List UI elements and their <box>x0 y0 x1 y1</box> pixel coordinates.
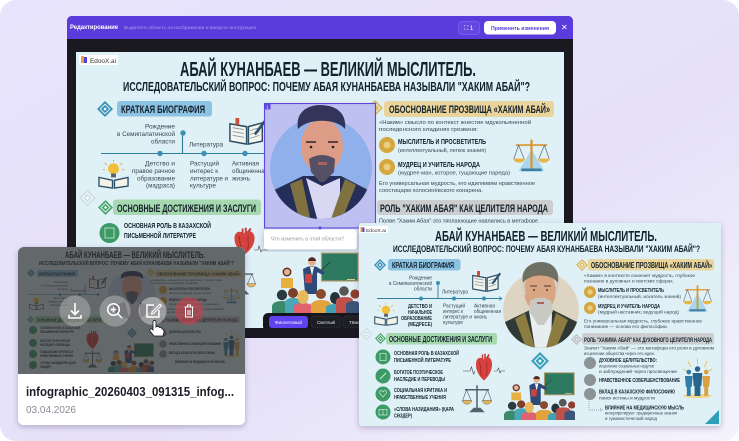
section: achievements: «СЛОВА НАЗИДАНИЯ» (ҚАРА <box>394 407 454 413</box>
gallery thumbnail: в Семипалатинской <box>41 284 68 288</box>
timeline: Активная <box>474 304 495 310</box>
section: nickname: Его универсальная мудрость, глубокое нравственное <box>584 318 702 324</box>
section: nickname: ОБОСНОВАНИЕ ПРОЗВИЩА «ХАКИМ АБАЙ» <box>389 103 550 116</box>
section: healer: Полве "Хаким Абая" это тяплаюющие навлились в метафоре <box>379 218 538 224</box>
section: nickname: (интеллектуальный, легкок знания) <box>398 147 486 154</box>
icon: book and pen <box>473 271 501 291</box>
section: achievements: ПИСЬМЕННОЙ ЛИТЕРАТУРЕ <box>394 356 451 364</box>
timeline: жизнь <box>474 314 487 320</box>
prompt input: Что изменить в этой области? <box>271 236 344 242</box>
timeline: литературе и <box>443 314 472 320</box>
panel: editor window <box>67 16 573 338</box>
section: nickname: Его универсальная мудрость, его идиляивям нравственное <box>379 181 535 187</box>
gallery thumbnail: МЫСЛИТЕЛЬ И ПРОСВЕТИТЕЛЬ <box>169 287 210 291</box>
section: healer: НРАВСТВЕННОЕ СОВЕРШЕНСТВОВАНИЕ <box>599 378 680 384</box>
icon: hand cursor <box>150 320 164 336</box>
editor header bar: Редактирование <box>70 24 118 31</box>
editor header bar: Применить изменения <box>491 26 549 32</box>
decorative knot <box>80 190 96 206</box>
icon: lightbulb <box>99 160 128 188</box>
section: biography <box>97 101 212 117</box>
section: nickname: «Хаким» в контексте означает мудрость, глубокое <box>584 273 695 279</box>
prompt input <box>264 230 357 250</box>
file name: infographic_20260403_091315_infog... <box>26 385 234 399</box>
button: delete <box>175 297 203 325</box>
gallery thumbnail: образование <box>50 303 68 307</box>
panel: editor infographic <box>76 52 564 331</box>
section: healer: РОЛЬ "ХАКИМ АБАЯ" КАК ЦЕЛИТЕЛЯ НАРОДА <box>380 203 548 215</box>
section: nickname: МЫСЛИТЕЛЬ И ПРОСВЕТИТЕЛЬ <box>598 288 664 294</box>
title: АБАЙ КУНАНБАЕВ — ВЕЛИКИЙ МЫСЛИТЕЛЬ. <box>180 57 476 81</box>
corner ornament <box>705 410 719 424</box>
gallery thumbnail: ВКЛАД В КАЗАХСКУЮ ФИЛОСОФИЮ <box>169 351 215 355</box>
timeline: Растущий <box>443 302 465 310</box>
timeline: интерес к <box>443 309 464 315</box>
timeline: общиненная <box>232 167 268 175</box>
timeline: интерес к <box>190 168 218 175</box>
timeline: общиненная <box>474 309 501 315</box>
timeline: Рождение <box>145 124 175 130</box>
gallery thumbnail: НАСЛЕДИЕ И ПЕРЕВОДЫ <box>40 343 70 347</box>
section: achievements: НАСЛЕДИЕ И ПЕРЕВОДЫ <box>394 377 445 383</box>
theme toolbar: Светлый <box>317 319 335 325</box>
section: nickname: последенсного кладинях грозвиня: <box>379 127 478 133</box>
section: biography: КРАТКАЯ БИОГРАФИЯ <box>121 104 205 116</box>
section: healer: интерпретируют традиционные знания <box>605 410 677 416</box>
timeline: в Семипалатинской <box>389 280 432 287</box>
button: edit <box>138 297 166 325</box>
timeline: области <box>414 286 432 292</box>
logo <box>359 226 388 233</box>
timeline: культуре <box>190 182 216 190</box>
selection frame <box>264 104 376 228</box>
gallery thumbnail: области <box>57 287 68 291</box>
icon: book and pen <box>230 118 266 144</box>
logo: EdooX.ai <box>90 59 116 65</box>
date: 03.04.2026 <box>26 405 76 416</box>
icon: lightbulb <box>375 303 397 325</box>
editor header bar: ✕ <box>561 23 568 32</box>
gallery thumbnail: соостицарм холосинёвского <box>150 310 199 314</box>
theme toolbar: Фиолетовый <box>275 319 302 325</box>
section: healer: и заблуждений через просвещение <box>599 368 677 374</box>
gallery thumbnail: НРАВСТВЕННОЕ СОВЕРШЕНСТВОВАНИЕ <box>169 342 222 346</box>
timeline: Растущий <box>190 160 219 168</box>
logo: EdooX.ai <box>366 228 386 233</box>
timeline: ОБРАЗОВАНИЕ <box>401 316 432 322</box>
theme toolbar <box>263 313 359 328</box>
editor header bar: Выделите область на изображении и введите инструкцию <box>124 25 256 31</box>
timeline <box>377 276 502 328</box>
gallery thumbnail: Его универсальная мудрость, его идиляивям <box>150 307 224 311</box>
gallery thumbnail: ОСНОВНЫЕ ДОСТИЖЕНИЯ И ЗАСЛУГИ <box>37 317 101 323</box>
section: nickname: познание в духовных и светских сферах. <box>584 278 674 284</box>
section: nickname: МУДРЕЦ И УЧИТЕЛЬ НАРОДА <box>398 160 480 169</box>
timeline: правое рачное <box>132 168 175 175</box>
gallery thumbnail: СӨЗДЕР) <box>40 365 51 369</box>
section: achievements: ПИСЬМЕННОЙ ЛИТЕРАТУРЕ <box>124 231 196 240</box>
icon: people <box>683 358 712 398</box>
section: nickname: «Наким» смысло по контекст жнестие мдукольяненной <box>379 119 531 126</box>
section: nickname: (мудрый наставник, ведущий народ) <box>598 308 679 314</box>
gallery thumbnail <box>18 247 245 374</box>
gallery thumbnail: (интеллектуальный, легкок знания) <box>169 291 211 295</box>
timeline <box>101 124 268 190</box>
section: healer: ВЛИЯНИЕ НА МЕДИЦИНСКУЮ МЫСЛЬ <box>605 406 684 412</box>
timeline: Литература <box>189 142 223 148</box>
gallery thumbnail: ВЛИЯНИЕ НА МЕДИЦИНСКУЮ МЫСЛЬ <box>175 360 225 364</box>
gallery thumbnail: последенсного кладинях грозвиня: <box>150 281 198 285</box>
portrait: Abai <box>503 262 579 350</box>
teacher scene <box>504 373 575 420</box>
editor header bar <box>67 16 573 39</box>
gallery thumbnail: правое рачное <box>48 300 68 304</box>
icon: heart <box>234 228 268 255</box>
gallery thumbnail: «СЛОВА НАЗИДАНИЯ» (ҚАРА <box>40 361 77 365</box>
gallery thumbnail: АБАЙ КУНАНБАЕВ — ВЕЛИКИЙ МЫСЛИТЕЛЬ. <box>65 249 205 260</box>
dark hover overlay <box>18 247 245 374</box>
section: achievements: ОСНОВНЫЕ ДОСТИЖЕНИЯ И ЗАСЛУГИ <box>117 203 256 215</box>
gallery thumbnail: КРАТКАЯ БИОГРАФИЯ <box>39 271 75 277</box>
gallery thumbnail: Детство и <box>54 296 68 300</box>
section: healer: исцеление социальных недугов <box>599 364 654 368</box>
icon: scale <box>462 385 492 412</box>
section: healer: исцелении общества через его идеи. <box>584 351 655 357</box>
timeline: ДЕТСТВО И <box>408 304 432 310</box>
portrait with selection: 1 <box>266 104 269 110</box>
gallery thumbnail: Литература <box>70 288 86 292</box>
decorative knot <box>360 328 373 340</box>
timeline: в Семипалатинской <box>117 130 175 138</box>
section: nickname: (мудрее ман, которое, гущающие пареда) <box>398 170 510 176</box>
section: healer <box>571 333 714 421</box>
gallery thumbnail: БОГАТОЕ ПОЭТИЧЕСКОЕ <box>40 339 70 343</box>
gallery thumbnail: ИССЛЕДОВАТЕЛЬСКИЙ ВОПРОС: ПОЧЕМУ АБАЯ КУНАНБАЕВА НАЗЫВАЛИ "ХАКИМ АБАЙ"? <box>39 259 234 267</box>
section: biography: КРАТКАЯ БИОГРАФИЯ <box>392 261 454 270</box>
section: achievements: БОГАТОЕ ПОЭТИЧЕСКОЕ <box>394 370 443 376</box>
button: download <box>60 296 90 326</box>
timeline: Рождение <box>409 276 432 282</box>
section: achievements <box>98 200 261 243</box>
timeline: образование <box>137 174 175 182</box>
section: healer <box>377 200 553 223</box>
section: nickname <box>367 100 554 194</box>
logo <box>79 55 118 65</box>
gallery thumbnail: Рождение <box>54 280 68 284</box>
gallery thumbnail: (мудрее ман, которое, гущающие) <box>169 302 219 306</box>
gallery thumbnail: СОЦИАЛЬНАЯ КРИТИКА И <box>40 350 74 354</box>
section: achievements: ОСНОВНЫЕ ДОСТИЖЕНИЯ И ЗАСЛУГИ <box>389 335 492 344</box>
icon: scale <box>245 273 256 294</box>
gallery thumbnail: ДУХОВНОЕ ЦЕЛИТЕЛЬСТВО <box>169 330 201 334</box>
gallery thumbnail: ОСНОВНАЯ РОЛЬ В КАЗАХСКОЙ <box>40 326 81 330</box>
button: zoom <box>100 296 130 326</box>
editor header bar: ⛶ 1 <box>464 25 474 32</box>
gallery thumbnail: «Наким» смысло по контекст жнестие <box>150 278 223 282</box>
section: achievements <box>375 333 497 420</box>
gallery thumbnail: МУДРЕЦ И УЧИТЕЛЬ НАРОДА <box>169 298 207 302</box>
section: nickname: соостицарм холосинёвского конарена. <box>379 188 483 194</box>
panel: gallery card <box>18 247 245 425</box>
icon: heart <box>463 354 505 381</box>
timeline: области <box>151 138 175 146</box>
section: healer: поиск истины и мудрости <box>599 396 655 400</box>
subtitle: ИССЛЕДОВАТЕЛЬСКИЙ ВОПРОС: ПОЧЕМУ АБАЯ КУНАНБАЕВА НАЗЫВАЛИ "ХАКИМ АБАЙ"? <box>123 79 530 94</box>
section: nickname: понимание — основа его философии. <box>584 324 668 330</box>
section: nickname: МУДРЕЦ И УЧИТЕЛЬ НАРОДА <box>598 304 660 310</box>
section: achievements: ОСНОВНАЯ РОЛЬ В КАЗАХСКОЙ <box>124 221 211 230</box>
gallery thumbnail: НРАВСТВЕННЫЕ УЧЕНИЯ <box>40 354 74 358</box>
timeline: (мадраса) <box>146 182 175 190</box>
section: nickname: МЫСЛИТЕЛЬ И ПРОСВЕТИТЕЛЬ <box>398 137 486 146</box>
section: healer: ДУХОВНОЕ ЦЕЛИТЕЛЬСТВО: <box>599 358 657 364</box>
panel: result infographic <box>359 223 721 426</box>
gallery thumbnail: РОЛЬ "ХАКИМ АБАЯ" КАК ЦЕЛИТЕЛЯ НАРОДА <box>154 317 238 323</box>
icon: ornament <box>531 352 549 370</box>
section: nickname <box>576 259 714 330</box>
section: achievements: ОСНОВНАЯ РОЛЬ В КАЗАХСКОЙ <box>394 349 459 357</box>
timeline: Активная <box>232 160 259 168</box>
portrait with selection <box>264 104 376 230</box>
section: healer: и гуманистический народ <box>605 415 657 421</box>
timeline: культуре <box>443 320 463 326</box>
timeline: Литература <box>442 290 468 296</box>
timeline: (МЕДРЕСЕ) <box>408 322 432 328</box>
timeline: литературе и <box>190 176 228 182</box>
section: biography <box>374 259 460 271</box>
section: achievements: НРАВСТВЕННЫЕ УЧЕНИЯ <box>394 395 446 401</box>
section: healer: ВКЛАД В КАЗАХСКУЮ ФИЛОСОФИЮ <box>599 390 675 396</box>
timeline: жизнь <box>232 176 250 182</box>
timeline: Детство и <box>145 160 175 168</box>
timeline: НАЧАЛЬНОЕ <box>408 310 432 316</box>
section: healer: Значит "Хаким Абай" — это метафора его роли в духовном <box>584 344 714 352</box>
section: achievements: СӨЗДЕР) <box>394 414 412 420</box>
gallery thumbnail: ПИСЬМЕННОЙ ЛИТЕРАТУРЕ <box>40 330 74 334</box>
section: nickname: (интеллектуальный, искатель знаний) <box>598 293 681 299</box>
gallery thumbnail: ОБОСНОВАНИЕ ПРОЗВИЩА «ХАКИМ АБАЙ» <box>157 269 240 277</box>
theme toolbar: Тёмный <box>349 319 366 325</box>
teacher scene <box>272 253 360 313</box>
section: achievements: СОЦИАЛЬНАЯ КРИТИКА И <box>394 388 447 394</box>
